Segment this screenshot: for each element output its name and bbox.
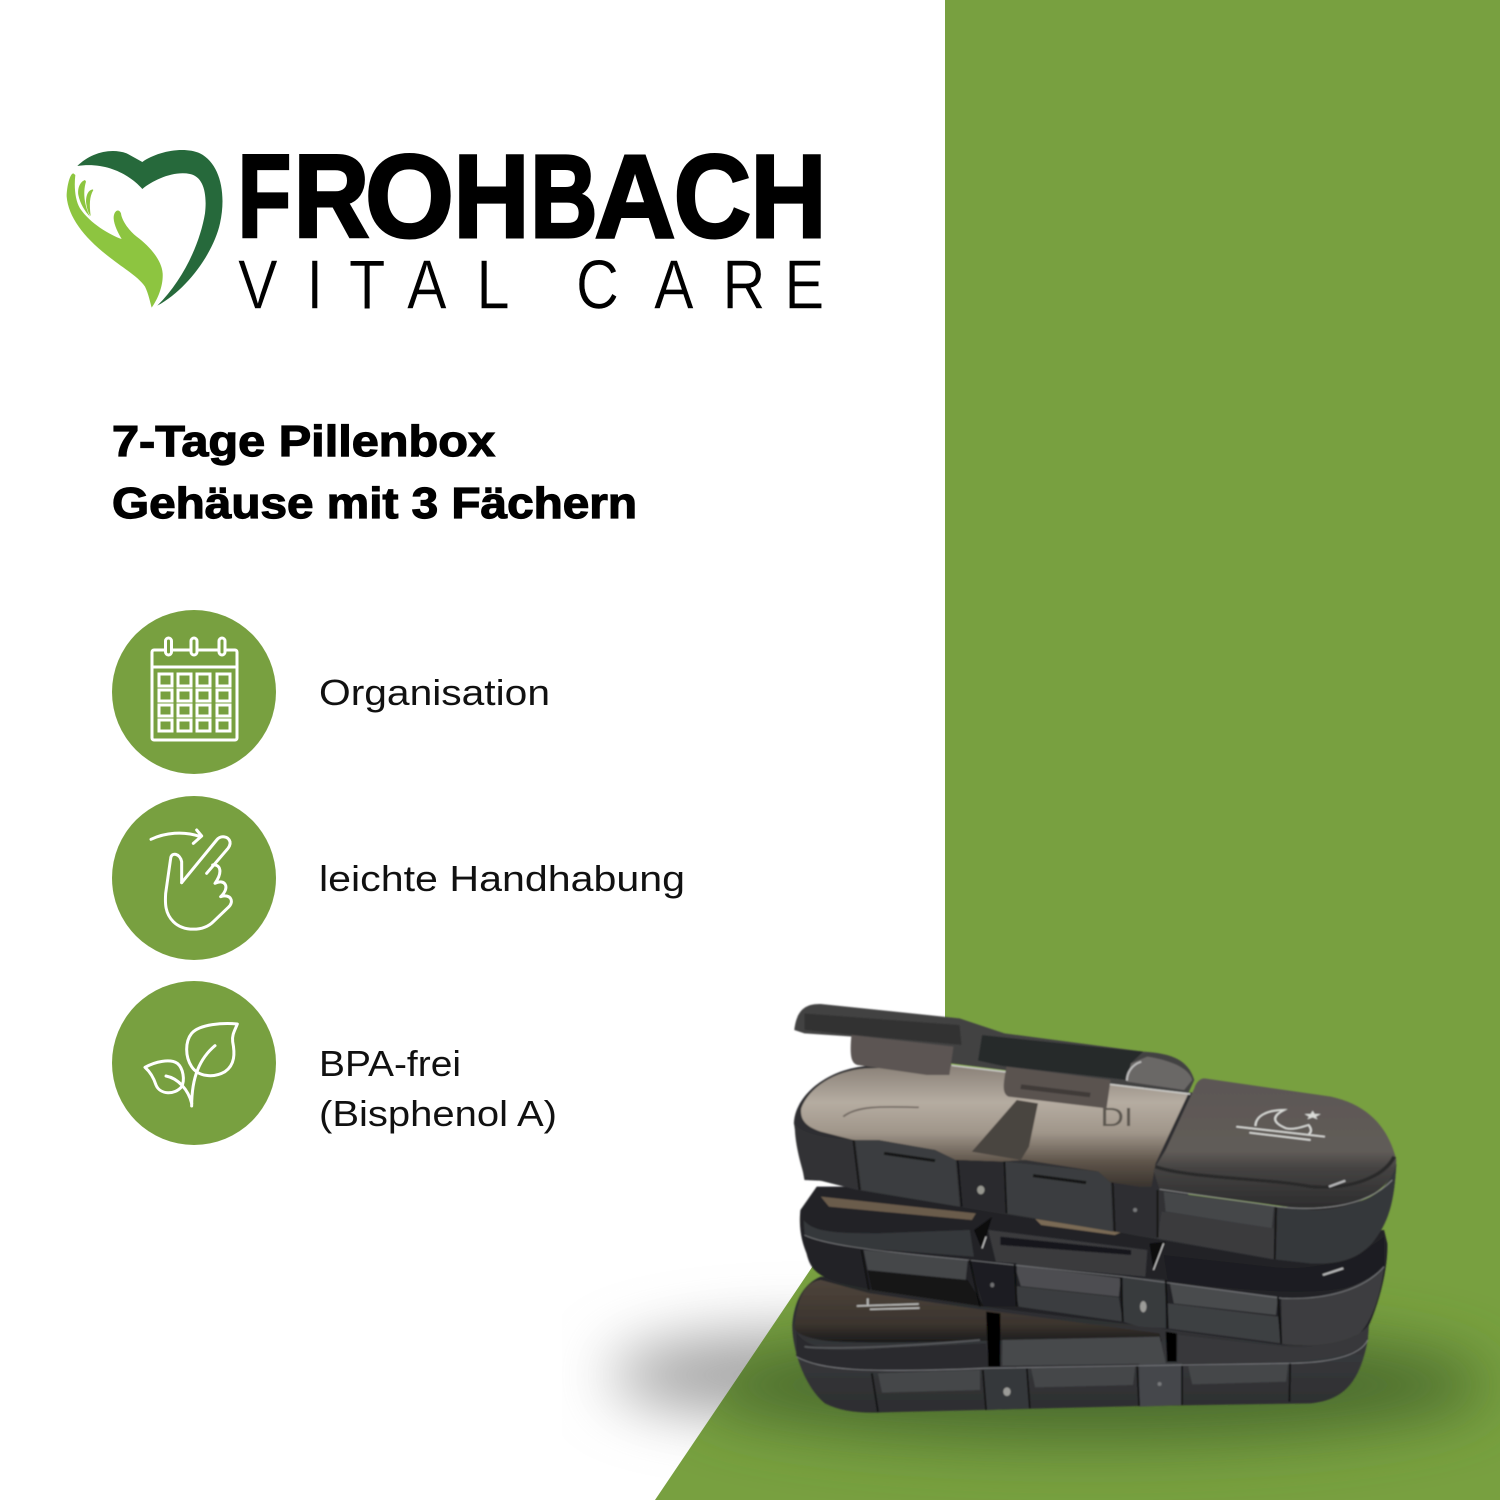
- label: BPA-frei (Bisphenol A): [319, 1043, 557, 1134]
- open compartments: [801, 1066, 1188, 1187]
- label: leichte Handhabung: leichte Handhabung: [319, 858, 685, 899]
- label: BPA-frei (Bisphenol A): BPA-frei: [319, 1043, 461, 1084]
- logo wordmark: FROHBACH: O: [365, 131, 454, 263]
- label: Organisation: Organisation: [319, 672, 550, 713]
- pill box: bottom: [792, 1277, 1370, 1413]
- icon: moon and star: [1236, 1110, 1325, 1140]
- heading: Gehäuse mit 3 Fächern: [112, 479, 637, 528]
- open lids: [794, 1004, 1194, 1093]
- logo wordmark: FROHBACH: R: [294, 131, 369, 263]
- logo wordmark: FROHBACH: H: [454, 131, 530, 263]
- box front wall: [795, 1123, 1396, 1264]
- heading: 7-Tage Pillenbox: [112, 417, 496, 466]
- feature: Organisation: [112, 610, 550, 774]
- logo wordmark: FROHBACH: A: [594, 131, 676, 263]
- feature: BPA-frei: [112, 981, 557, 1145]
- pill box: top, open with moon lid: [794, 1004, 1396, 1264]
- icon: swiping hand: [112, 796, 276, 960]
- logo: heart and hand mark: [67, 150, 222, 308]
- product: stacked black pill boxes: [792, 1004, 1396, 1413]
- feature: leichte Handhabung: [112, 796, 685, 960]
- logo wordmark: FROHBACH: C: [674, 131, 751, 263]
- product shadow on white: [610, 1333, 990, 1417]
- pill box: middle: [800, 1187, 1387, 1346]
- logo wordmark: FROHBACH: B: [530, 131, 598, 263]
- printed day mark DI: DI: [1100, 1104, 1133, 1132]
- icon: calendar: [112, 610, 276, 774]
- product shadow on green: [690, 1330, 1490, 1440]
- dark shell behind compartments: [794, 1065, 1192, 1197]
- heading: [112, 417, 637, 528]
- moon lid: [1153, 1078, 1396, 1210]
- background: green panel with diagonal foot: [655, 0, 1500, 1500]
- logo wordmark: FROHBACH: F: [238, 131, 291, 263]
- label: BPA-frei (Bisphenol A): (Bisphenol A): [319, 1093, 557, 1134]
- logo wordmark: VITAL CARE: VITAL CARE: [0, 245, 824, 324]
- logo wordmark: FROHBACH: H: [750, 131, 826, 263]
- icon: leaf sprout: [112, 981, 276, 1145]
